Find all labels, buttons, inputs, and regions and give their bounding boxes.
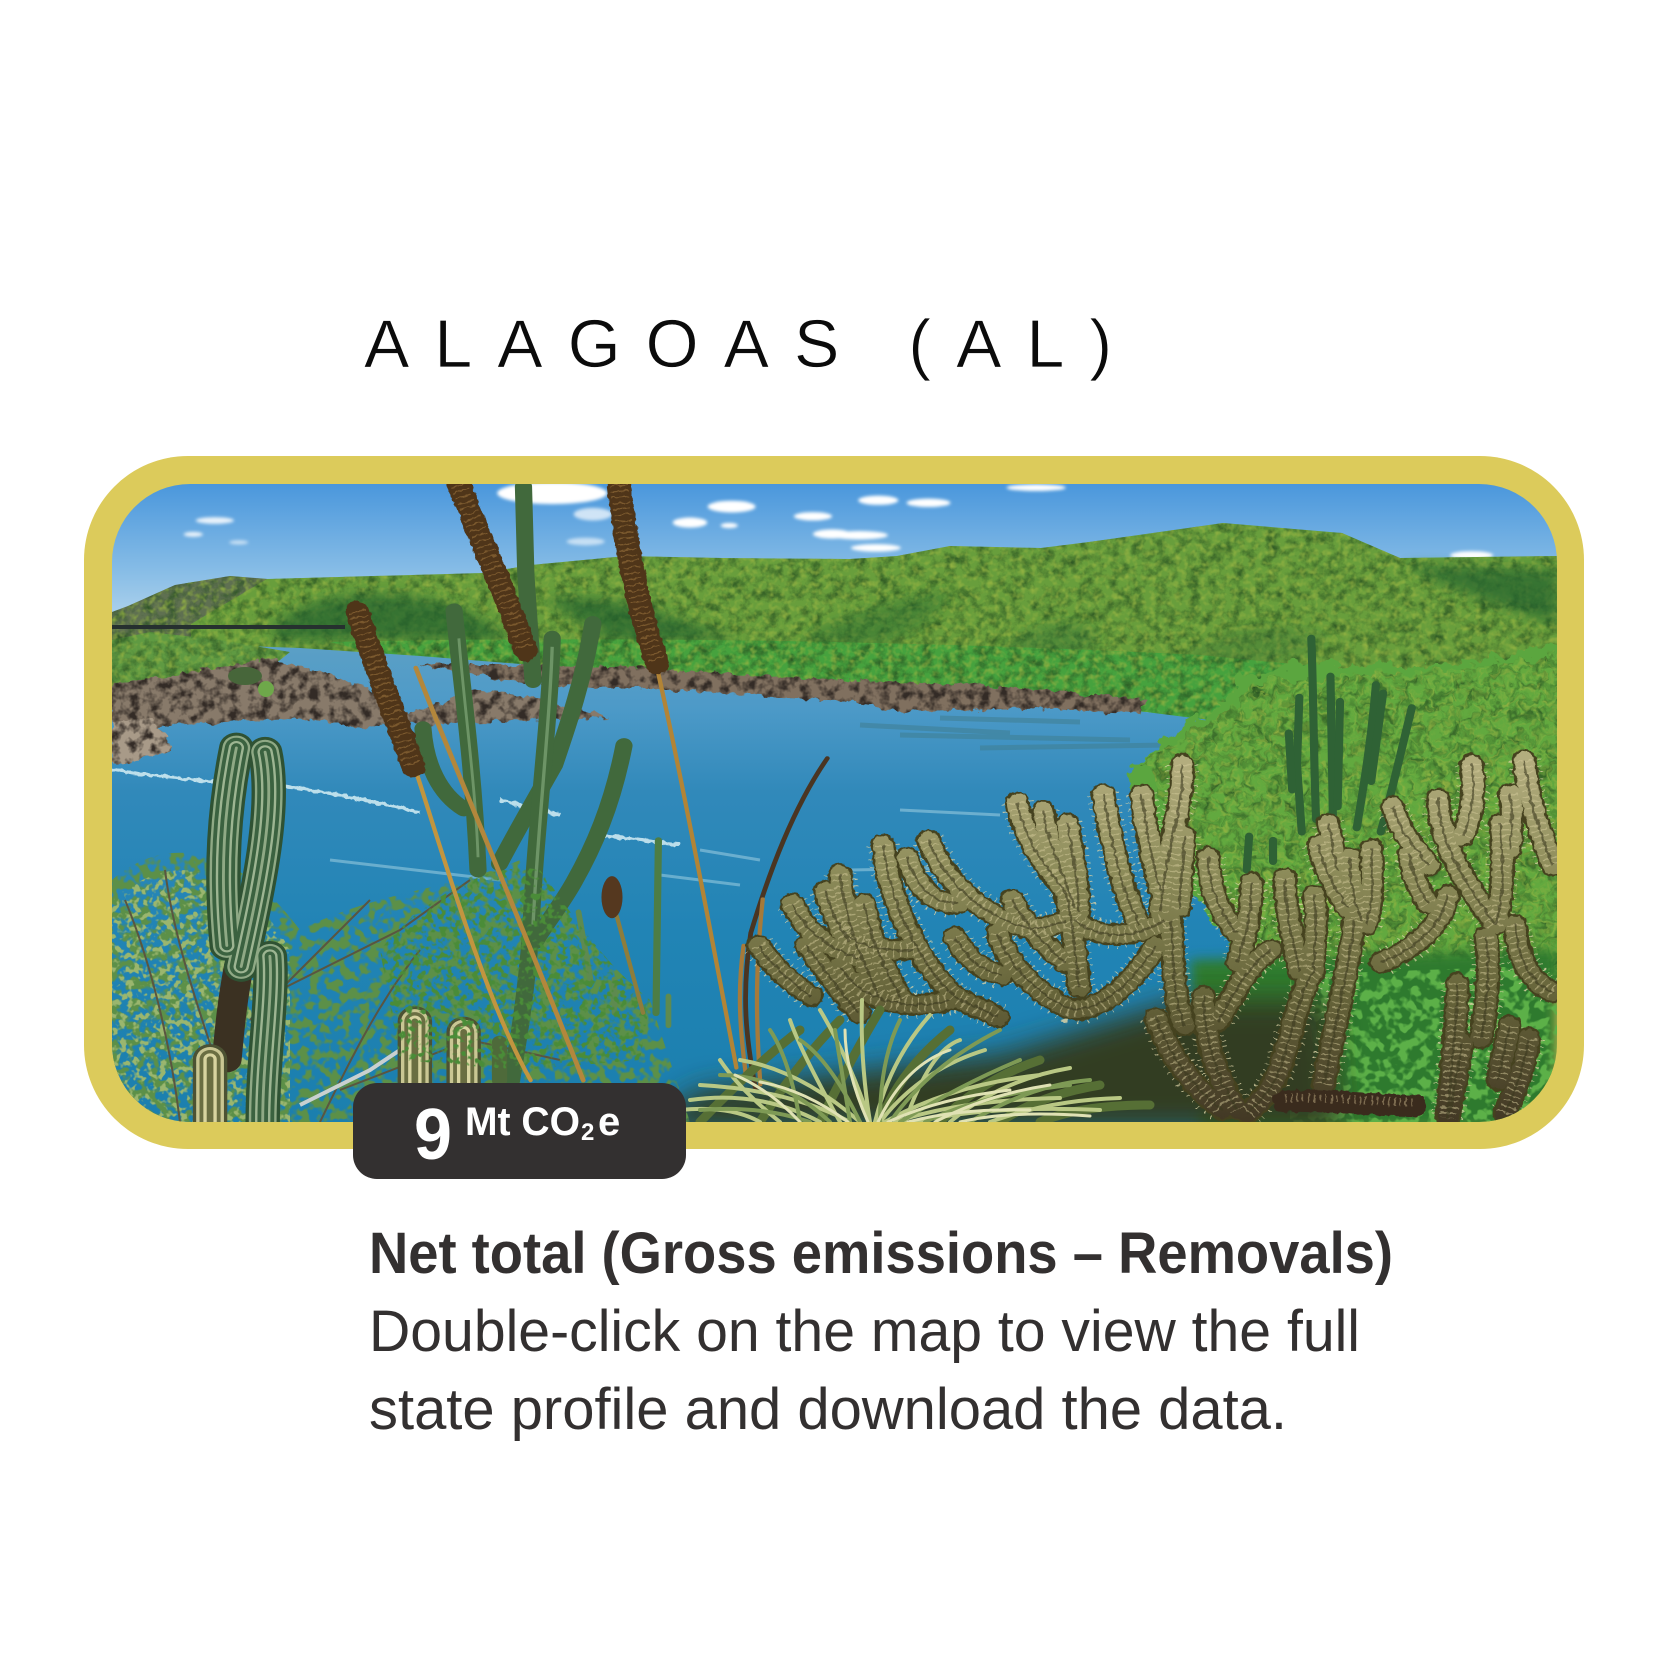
thin green cacti xyxy=(1242,634,1416,874)
description text: state profile and download the data. xyxy=(369,1377,1287,1442)
big number: 9 xyxy=(414,1095,452,1175)
plumes xyxy=(357,485,657,767)
foliage over cacti xyxy=(380,868,650,1070)
green hills xyxy=(191,523,1557,670)
unit label: Mt CO xyxy=(465,1100,580,1144)
description text: Double-click on the map to view the full xyxy=(369,1299,1360,1364)
bridge xyxy=(112,625,345,629)
columnar cactus xyxy=(210,748,500,1127)
branching cacti foreground xyxy=(759,760,1553,1118)
description text xyxy=(369,1299,1360,1442)
plumes and stalks xyxy=(416,668,827,1089)
infographic canvas xyxy=(84,318,1584,1441)
photo frame xyxy=(84,456,1584,1149)
far hill xyxy=(112,576,268,640)
right tree xyxy=(1123,642,1557,982)
unit label: e xyxy=(598,1100,620,1144)
tall candelabra cactus xyxy=(423,487,668,1080)
far rocky shore xyxy=(418,664,1146,714)
left rocks xyxy=(112,658,610,735)
clouds xyxy=(184,482,1493,560)
foliage left xyxy=(112,853,690,1122)
grass xyxy=(680,1000,1150,1122)
title: ALAGOAS (AL) xyxy=(364,306,1112,382)
landscape photo xyxy=(112,482,1600,1130)
river xyxy=(112,645,1300,1122)
ground foliage right xyxy=(1190,950,1557,1130)
hill shadows xyxy=(270,565,1557,670)
shrub branches xyxy=(125,870,560,1122)
sky xyxy=(112,484,1557,724)
left bank vegetation xyxy=(112,632,290,690)
description heading: Net total (Gross emissions – Removals) xyxy=(369,1221,1393,1286)
river streaks and rapids xyxy=(112,718,1170,885)
emissions badge xyxy=(353,1083,686,1179)
unit label: 2 xyxy=(581,1119,594,1146)
bottom shadow ground xyxy=(640,1000,1340,1130)
riverside vegetation xyxy=(331,639,1339,720)
